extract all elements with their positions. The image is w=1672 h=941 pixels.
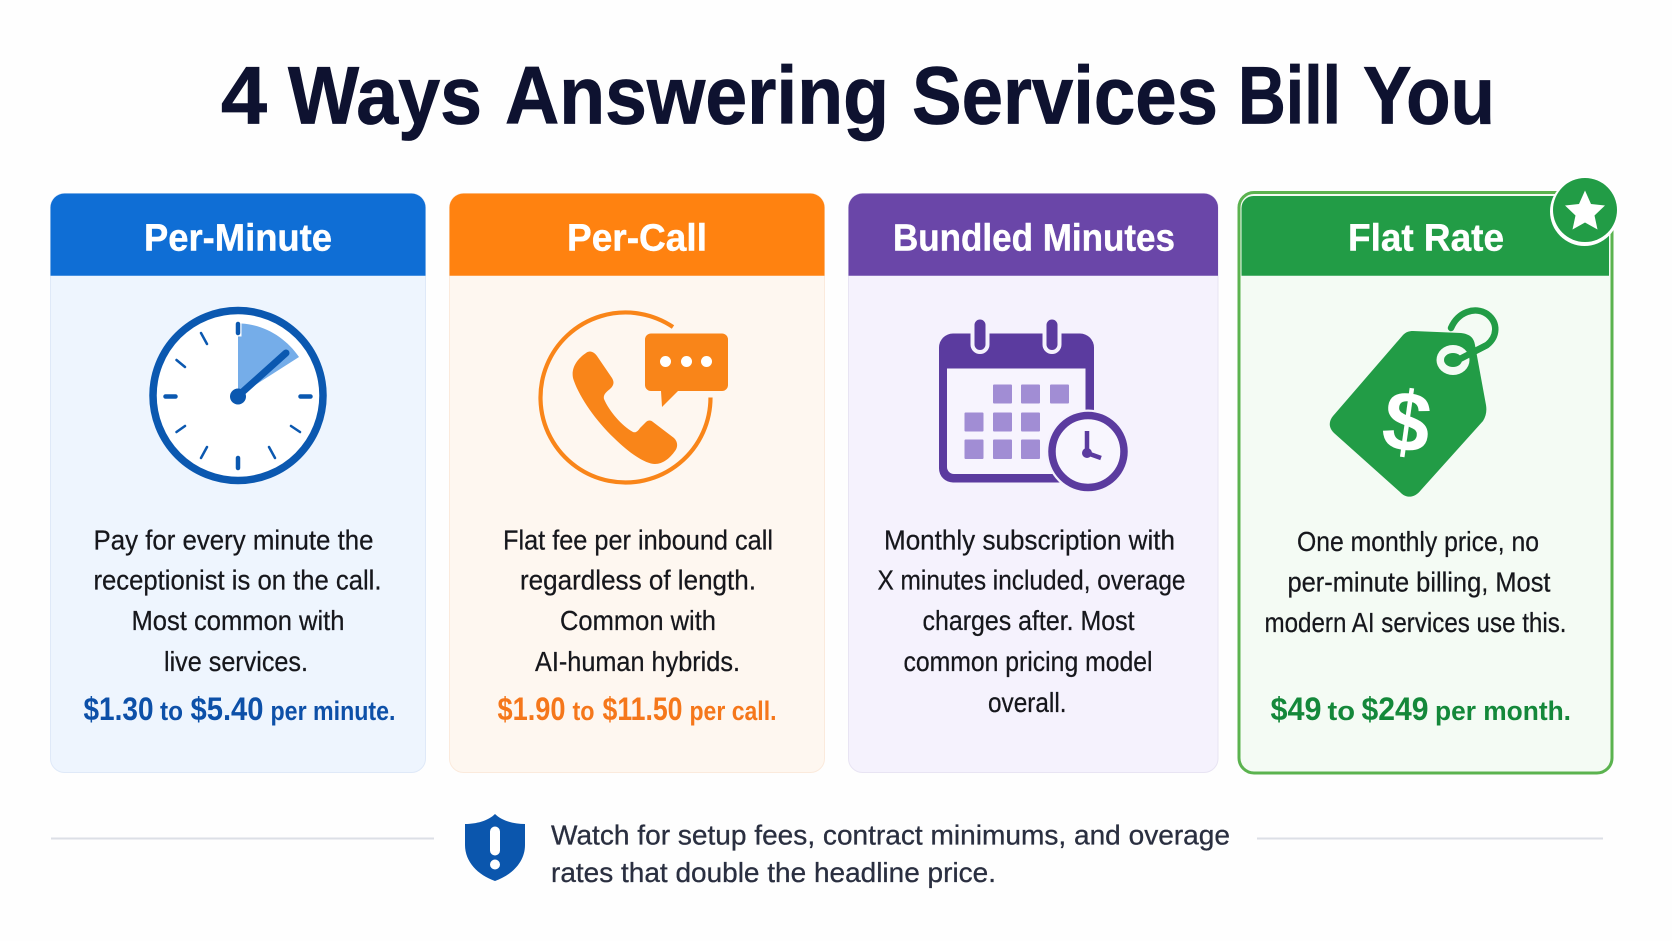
price: to <box>572 696 594 726</box>
description: modern AI services use this. <box>1264 607 1566 638</box>
title: Answering <box>505 50 889 142</box>
warning text: rates that double the headline price. <box>551 857 996 888</box>
panel: per-minute <box>50 194 426 772</box>
price: per minute. <box>270 696 396 726</box>
description <box>94 524 382 677</box>
card body <box>1239 192 1612 773</box>
description: X minutes included, overage <box>878 564 1186 596</box>
card body <box>848 194 1218 772</box>
price: $11.50 <box>602 691 682 727</box>
heading: Flat Rate <box>1348 218 1504 260</box>
card body <box>50 194 426 772</box>
heading: Per-Minute <box>144 218 332 260</box>
heading: Per-Call <box>567 218 707 260</box>
warning text <box>551 820 1230 888</box>
description: Common with <box>560 605 716 636</box>
price <box>498 691 776 727</box>
footer warning <box>51 814 1603 888</box>
icon: price tag <box>1330 310 1495 497</box>
price <box>1270 691 1571 727</box>
icon: shield <box>465 814 525 881</box>
panel: flat rate <box>1239 177 1619 773</box>
warning text: Watch for setup fees, contract minimums, and overage <box>551 820 1230 850</box>
title <box>221 50 1495 142</box>
price: to <box>1328 696 1355 726</box>
card header <box>50 194 426 276</box>
description: Flat fee per inbound call <box>503 524 773 556</box>
heading: Bundled Minutes <box>893 218 1175 260</box>
description: One monthly price, no <box>1297 526 1539 557</box>
icon: clock <box>153 310 323 480</box>
price <box>84 691 396 727</box>
title: Ways <box>288 50 482 142</box>
description: charges after. Most <box>922 605 1135 636</box>
icon: calendar with clock <box>939 318 1130 494</box>
description: Most common with <box>132 605 344 636</box>
icon: phone with speech bubble <box>540 312 728 482</box>
title: Bill <box>1238 50 1341 142</box>
description <box>503 524 773 677</box>
description: AI-human hybrids. <box>535 646 740 677</box>
description: per-minute billing, Most <box>1288 566 1551 598</box>
description <box>1264 526 1566 638</box>
card header <box>1242 196 1609 276</box>
card header <box>848 194 1218 276</box>
price: $5.40 <box>190 691 264 727</box>
description: regardless of length. <box>520 564 756 596</box>
description: live services. <box>164 646 308 677</box>
price: to <box>160 696 183 726</box>
description: Pay for every minute the <box>94 524 374 556</box>
price: per call. <box>690 696 776 726</box>
panel: per-call <box>450 194 824 772</box>
title: You <box>1363 50 1495 142</box>
price: $1.30 <box>84 691 154 727</box>
title: 4 <box>221 50 267 142</box>
icon: price tag: $ <box>1377 372 1437 473</box>
card header <box>450 194 824 276</box>
icon: star badge <box>1550 177 1619 246</box>
price: per month. <box>1435 696 1571 726</box>
price: $49 <box>1270 691 1322 727</box>
card body <box>450 194 824 772</box>
price: $1.90 <box>498 691 566 727</box>
price: $249 <box>1362 691 1428 727</box>
description: receptionist is on the call. <box>94 564 382 596</box>
panel: bundled minutes <box>848 194 1218 772</box>
title: Services <box>912 50 1218 142</box>
description: Monthly subscription with <box>884 524 1175 556</box>
description: overall. <box>988 687 1066 718</box>
description <box>878 524 1186 718</box>
description: common pricing model <box>904 646 1152 677</box>
